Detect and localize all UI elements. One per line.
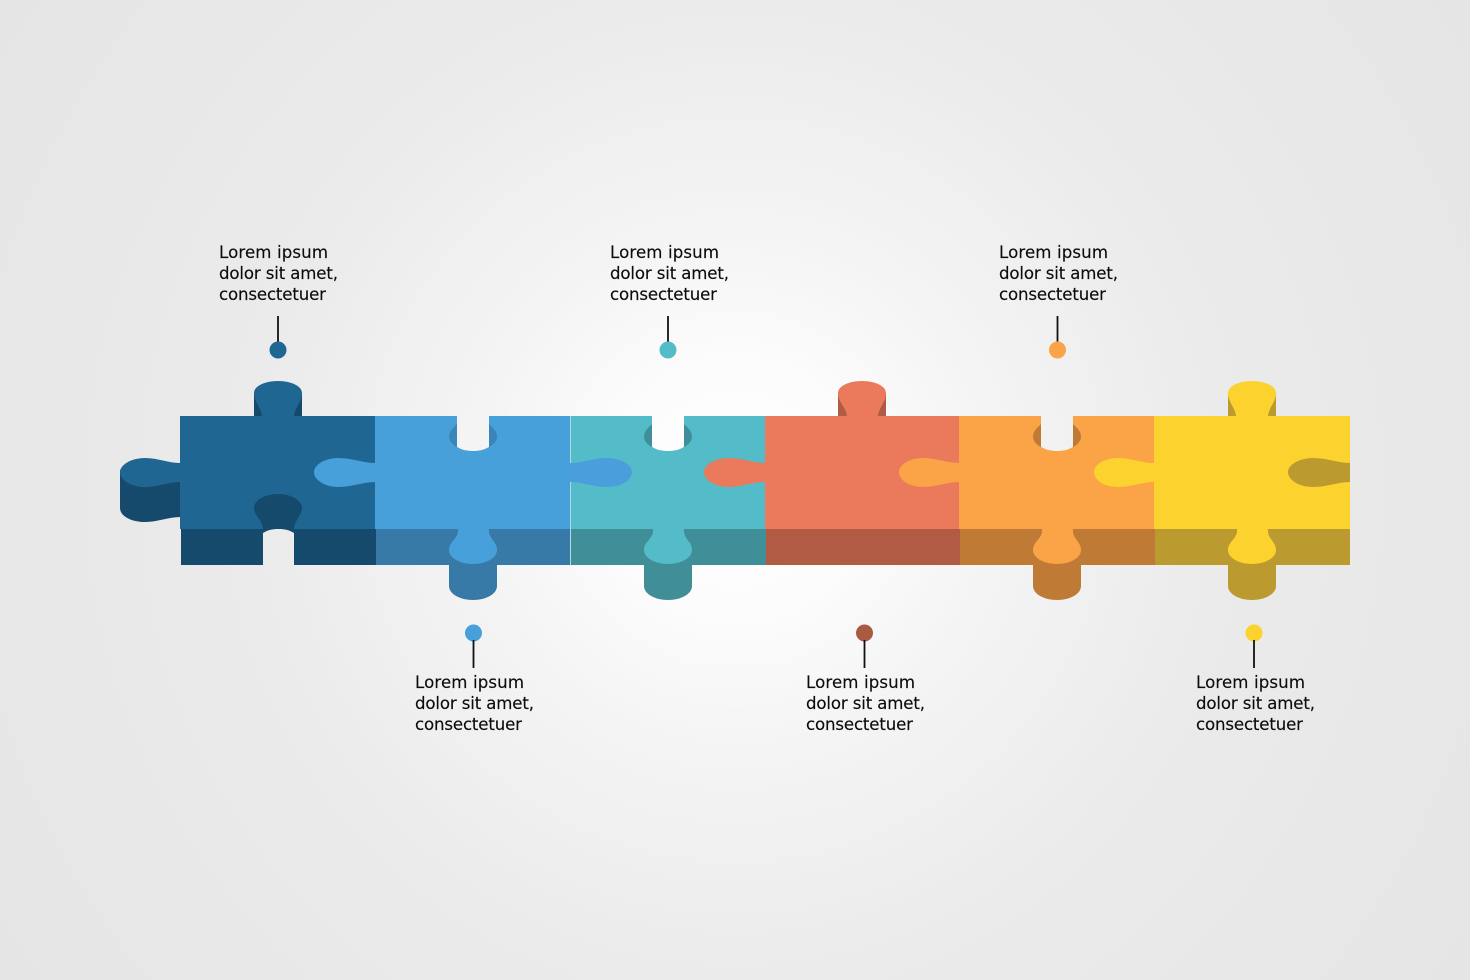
- callout 4: coral, bottom: [806, 624, 925, 734]
- callout 5: orange, top: Lorem ipsum: [999, 243, 1108, 262]
- callout 2: light blue, bottom: Lorem ipsum: [415, 673, 524, 692]
- callout 4: coral, bottom: Lorem ipsum: [806, 673, 915, 692]
- callout 6: yellow, bottom: consectetuer: [1196, 715, 1303, 734]
- callout 6: yellow, bottom: [1196, 624, 1315, 734]
- callout 5: orange, top: [999, 243, 1118, 358]
- puzzle piece 3: teal: [570, 415, 766, 600]
- callout 1: dark blue, top: [219, 243, 338, 358]
- puzzle piece 2: light blue: [314, 415, 571, 600]
- puzzle piece 5: orange: [899, 415, 1155, 600]
- callout 1: dark blue, top: Lorem ipsum: [219, 243, 328, 262]
- callout 5: orange, top: dolor sit amet,: [999, 264, 1118, 283]
- callout 6: yellow, bottom: Lorem ipsum: [1196, 673, 1305, 692]
- callout 2: light blue, bottom: [415, 624, 534, 734]
- puzzle piece 1: dark blue: [120, 381, 376, 566]
- callout 1: dark blue, top: consectetuer: [219, 285, 326, 304]
- puzzle piece 6: yellow: [1094, 381, 1350, 600]
- callout 3: teal, top: consectetuer: [610, 285, 717, 304]
- callout 2: light blue, bottom: dolor sit amet,: [415, 694, 534, 713]
- callout 2: light blue, bottom: consectetuer: [415, 715, 522, 734]
- callout 3: teal, top: Lorem ipsum: [610, 243, 719, 262]
- callout 4: coral, bottom: consectetuer: [806, 715, 913, 734]
- callout 5: orange, top: consectetuer: [999, 285, 1106, 304]
- callout 3: teal, top: dolor sit amet,: [610, 264, 729, 283]
- callout 6: yellow, bottom: dolor sit amet,: [1196, 694, 1315, 713]
- callout 1: dark blue, top: dolor sit amet,: [219, 264, 338, 283]
- callout 4: coral, bottom: dolor sit amet,: [806, 694, 925, 713]
- callout 3: teal, top: [610, 243, 729, 358]
- puzzle piece 4: coral: [704, 381, 960, 565]
